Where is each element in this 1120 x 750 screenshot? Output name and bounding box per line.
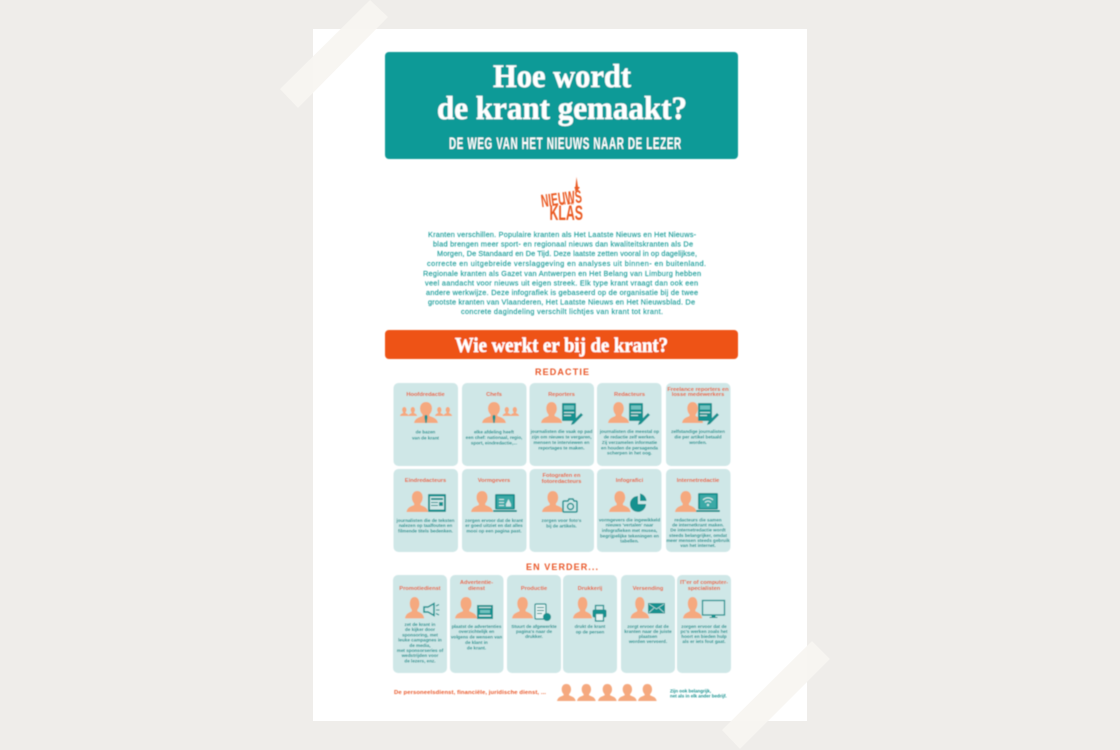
card: Vormgevers: zorgen ervoor dat de krant	[465, 518, 523, 523]
card: Internetredactie: van het internet.	[680, 543, 716, 548]
card: Promotiedienst: Promotiedienst	[399, 586, 441, 592]
icon: ad sales with ad page	[455, 597, 493, 619]
card: Infografici: vormgevers die ingewikkeld	[599, 518, 660, 522]
icon: chief with team	[400, 402, 452, 423]
card: Versending: worden vervoerd.	[628, 639, 667, 644]
icon: designer with laptop	[471, 491, 517, 512]
intro text: concrete dagindeling verschilt lichtjes van krant tot krant.	[461, 307, 663, 316]
card: Promotiedienst: wedstrijden voor	[401, 653, 439, 658]
card: Vormgevers: mooi op een pagina past.	[466, 528, 522, 534]
card: Advertentiedienst: overzichtelijk en	[459, 629, 495, 634]
heading: Redactie: REDACTIE	[535, 367, 589, 377]
card: Reporters: Reporters	[548, 392, 575, 398]
intro text: Kranten verschillen. Populaire kranten als Het Laatste Nieuws en Het Nieuws-	[428, 230, 697, 239]
card: Infografici: infografieken met musea,	[602, 528, 657, 533]
logo: Nieuws in de Klas: NIEUWS	[540, 186, 583, 211]
card: IT'er of computerspecialisten: IT'er of computer-	[680, 580, 728, 586]
card: Advertentiedienst: de krant.	[467, 646, 486, 650]
card: Freelance reporters	[666, 383, 730, 466]
card: Hoofdredactie: van de krant	[412, 436, 440, 440]
icon: reporter with notepad	[541, 402, 583, 425]
card: IT'er of computerspecialisten	[677, 575, 731, 673]
subtitle: DE WEG VAN HET NIEUWS NAAR DE LEZER	[449, 134, 681, 153]
card: Infografici: tabellen.	[620, 538, 639, 544]
icon: production with document	[512, 597, 551, 621]
card: Internetredactie: Internetredactie	[677, 478, 719, 484]
card: Reporters: mensen te interviewen en	[534, 440, 590, 445]
card: Advertentiedienst: volgens de wensen van	[451, 634, 502, 640]
card: Advertentiedienst: de klant in	[465, 640, 488, 645]
card: Redacteurs: journalisten die meestal op	[599, 429, 659, 434]
title: Hoe wordt	[493, 59, 631, 95]
card: Fotografen en fotoredacteurs: Fotografen en	[543, 473, 581, 479]
header banner	[385, 52, 738, 159]
card: Redacteurs: scherpen in het oog.	[607, 450, 652, 456]
card: Versending	[621, 575, 675, 673]
card: Reporters: zijn om nieuws te vergaren,	[532, 434, 592, 440]
card: Fotografen en fotoredacteurs: fotoredacteurs	[542, 479, 581, 485]
card: IT'er of computerspecialisten: hoort en bieden hulp	[681, 634, 727, 639]
card: Productie: Stuurt de afgewerkte	[511, 624, 557, 629]
card: Internetredactie	[666, 469, 730, 552]
logo: Nieuws in de Klas: IN DE	[561, 202, 575, 206]
card: Drukkerij: drukt de krant	[575, 624, 606, 629]
card: Chefs: elke afdeling heeft	[474, 430, 515, 434]
card: Advertentiedienst: Advertentie-	[460, 580, 493, 586]
card: Advertentiedienst: plaatst de advertenties	[452, 624, 502, 629]
footer note: other services: De personeelsdienst, financiële, juridische dienst, ...	[394, 690, 546, 696]
card: IT'er of computerspecialisten: als er iets fout gaat.	[682, 639, 726, 644]
card: IT'er of computerspecialisten: zorgen ervoor dat de	[681, 624, 727, 629]
card: IT'er of computerspecialisten: pc's werken zoals het	[680, 629, 728, 634]
icon: freelancer with notepad	[682, 402, 719, 425]
card: Reporters	[530, 383, 594, 466]
card: Freelance reporters: worden.	[688, 440, 707, 445]
card: Freelance reporters: die per artikel betaald	[674, 434, 722, 440]
card: Freelance reporters: Freelance reporters en	[667, 387, 729, 393]
card: Vormgevers: Vormgevers	[478, 478, 510, 484]
icon: monitor	[683, 597, 724, 618]
logo: Nieuws in de Klas	[540, 177, 583, 225]
card: Fotografen en fotoredacteurs: zorgen voor foto's	[542, 518, 582, 523]
card: Eindredacteurs: filmende titels bedenken.	[398, 528, 453, 534]
card: Advertentiedienst	[450, 575, 504, 673]
intro text: grootste kranten van Vlaanderen, Het Laatste Nieuws en Het Nieuwsblad. De	[428, 298, 695, 306]
card: Eindredacteurs	[394, 469, 458, 552]
section banner: Wie werkt er bij de krant?	[385, 330, 738, 359]
intro text: correcte en uitgebreide verslaggeving en analyses uit binnen- en buitenland.	[427, 259, 706, 268]
intro text: blad brengen meer sport- en regionaal nieuws dan kwaliteitskranten als De	[433, 240, 693, 248]
card: Internetredactie: steeds belangrijker, omdat	[669, 533, 727, 538]
card: Infografici: Infografici	[616, 478, 644, 484]
card: Hoofdredactie: Hoofdredactie	[406, 392, 445, 398]
card: Productie: drukker.	[525, 634, 543, 639]
card: Productie: pagina's naar de	[516, 629, 552, 634]
card: Eindredacteurs: nalezen op taalfouten en	[399, 523, 452, 528]
card: Hoofdredactie: de bazen	[416, 430, 436, 434]
card: Promotiedienst	[393, 575, 447, 673]
card: Infografici: begrijpelijke tekeningen en	[600, 534, 659, 538]
card: IT'er of computerspecialisten: specialisten	[688, 586, 721, 592]
intro text	[423, 230, 706, 316]
tape: bottom right	[722, 641, 830, 749]
intro text: Morgen, De Standaard en De Tijd. Deze laatste zetten vooral in op dagelijkse,	[437, 249, 697, 258]
card: Advertentiedienst: dienst	[468, 586, 485, 592]
card: Promotiedienst: de lezers, enz.	[404, 658, 436, 664]
card: Promotiedienst: sponsoring, met	[402, 632, 438, 638]
heading: En verder: EN VERDER...	[526, 562, 598, 572]
card: Drukkerij: op de persen	[576, 630, 604, 634]
card: Chefs	[462, 383, 526, 466]
card: Redacteurs: Redacteurs	[614, 392, 645, 398]
icon: editor with notepad	[608, 402, 650, 425]
card: Internetredactie: redacteurs die samen	[674, 518, 722, 522]
icon: web editor with laptop	[675, 491, 720, 512]
icon: graphic artist with pie chart	[609, 491, 646, 512]
card: Fotografen en fotoredacteurs	[530, 469, 594, 552]
intro text: Regionale kranten als Gazet van Antwerpen en Het Belang van Limburg hebben	[423, 269, 701, 278]
card: Eindredacteurs: Eindredacteurs	[405, 478, 446, 484]
card: Redacteurs: en houden de persagenda	[601, 446, 658, 450]
card: Drukkerij	[563, 575, 617, 673]
card: Versending: kranten naar de juiste	[624, 629, 672, 634]
logo: Nieuws in de Klas: KLAS	[550, 202, 583, 225]
card: Infografici: nieuws 'vertalen' naar	[606, 522, 654, 528]
card: Hoofdredactie	[394, 383, 458, 466]
card: Reporters: reportages te maken.	[538, 446, 585, 450]
card: Reporters: journalisten die vaak op pad	[530, 429, 593, 434]
card: Redacteurs: Zij verzamelen informatie	[602, 440, 658, 445]
card: Versending: Versending	[633, 586, 664, 592]
card: Eindredacteurs: journalisten die de teksten	[396, 518, 455, 523]
card: Productie	[507, 575, 561, 673]
tape: top left	[280, 0, 388, 108]
icon: copy editor with page	[406, 491, 446, 512]
card: Internetredactie: De internetredactie wordt	[670, 528, 726, 532]
card: Promotiedienst: de kijker door	[405, 627, 435, 632]
card: Productie: Productie	[521, 586, 547, 592]
footer note: also important: Zijn ook belangrijk,	[670, 688, 711, 694]
card: Promotiedienst: zet de krant in	[405, 622, 436, 627]
card: Fotografen en fotoredacteurs: bij de artikels.	[546, 524, 577, 528]
card: Freelance reporters: losse medewerkers	[672, 392, 724, 398]
card: Chefs: Chefs	[486, 392, 502, 398]
card: Promotiedienst: leuke campagnes in	[398, 638, 442, 642]
card: Internetredactie: de internetkrant maken.	[672, 522, 724, 528]
icon: promoter with megaphone	[405, 597, 440, 618]
card: Freelance reporters: zelfstandige journalisten	[671, 429, 725, 434]
card: Drukkerij: Drukkerij	[578, 586, 603, 592]
card: Promotiedienst: met sponsorseries of	[397, 648, 444, 653]
intro text: veel aandacht voor nieuws uit eigen streek. Elk type krant vraagt dan ook een	[425, 278, 698, 288]
card: Versending: zorgt ervoor dat de	[627, 624, 669, 629]
card: Promotiedienst: de media,	[409, 643, 431, 648]
card: Infografici	[597, 469, 662, 552]
card: Redacteurs: de redactie zelf werken.	[604, 434, 655, 440]
section banner: Wie werkt er bij de krant?: Wie werkt er bij de krant?	[455, 333, 668, 357]
card: Chefs: sport, eindredactie,...	[471, 440, 517, 446]
card: Chefs: een chef: nationaal, regio,	[466, 435, 522, 440]
icon: printer	[573, 597, 606, 621]
intro text: andere werkwijze. Deze infografiek is gebaseerd op de organisatie bij de twee	[426, 288, 698, 297]
card: Redacteurs	[597, 383, 662, 466]
icon: row of five people	[557, 684, 657, 701]
icon: envelope	[630, 597, 665, 618]
icon: chef with team	[482, 402, 519, 423]
card: Vormgevers: er goed uitziet en dat alles	[465, 523, 523, 528]
icon: photographer with camera	[542, 491, 577, 512]
title: de krant gemaakt?	[437, 91, 687, 127]
card: Versending: plaatsen	[639, 634, 658, 639]
card: Internetredactie: meer mensen steeds gebruik	[666, 538, 730, 543]
poster sheet	[313, 29, 807, 721]
footer note: also important: net als in elk ander bedrijf.	[670, 694, 727, 698]
card: Vormgevers	[462, 469, 526, 552]
